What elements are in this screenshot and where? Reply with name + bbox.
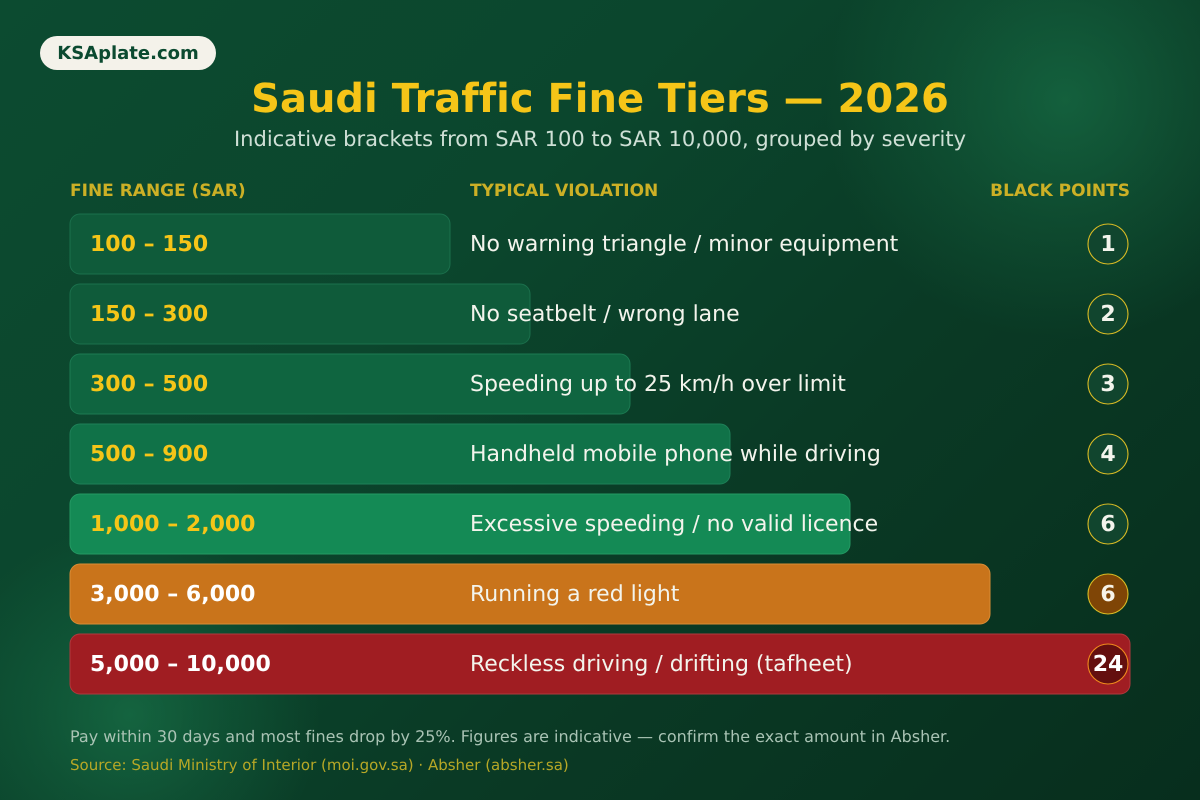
title: Saudi Traffic Fine Tiers — 2026 (251, 76, 949, 122)
points badge: 3 (1100, 372, 1116, 397)
row: 500 – 900 (70, 424, 1128, 484)
bar (70, 494, 850, 554)
fine range: 300 – 500 (90, 372, 208, 397)
bar (70, 424, 730, 484)
points badge (1088, 294, 1128, 334)
points badge: 6 (1100, 512, 1116, 537)
points badge: 24 (1093, 652, 1123, 677)
fine range: 150 – 300 (90, 302, 208, 327)
column heading: typical violation: TYPICAL VIOLATION (470, 181, 658, 201)
fine range: 1,000 – 2,000 (90, 512, 256, 537)
violation: Excessive speeding / no valid licence (470, 512, 878, 537)
source line: Source: Saudi Ministry of Interior (moi.gov.sa) · Absher (absher.sa) (70, 756, 569, 774)
brand badge: KSAplate.com (57, 43, 199, 64)
points badge (1088, 504, 1128, 544)
row: 5,000 – 10,000 (70, 634, 1130, 694)
bar (70, 634, 1130, 694)
brand badge (40, 36, 216, 70)
violation: Running a red light (470, 582, 680, 607)
bar (70, 564, 990, 624)
row: 300 – 500 (70, 354, 1128, 414)
bar (70, 214, 450, 274)
points badge (1088, 574, 1128, 614)
points badge (1088, 644, 1128, 684)
points badge (1088, 364, 1128, 404)
row: 100 – 150 (70, 214, 1128, 274)
points badge (1088, 434, 1128, 474)
violation: No seatbelt / wrong lane (470, 302, 740, 327)
points badge: 6 (1100, 582, 1116, 607)
subtitle: Indicative brackets from SAR 100 to SAR 10,000, grouped by severity (234, 127, 966, 151)
bar (70, 354, 630, 414)
row: 150 – 300 (70, 284, 1128, 344)
violation: Reckless driving / drifting (tafheet) (470, 652, 853, 677)
violation: Handheld mobile phone while driving (470, 442, 881, 467)
bar (70, 284, 530, 344)
points badge: 2 (1100, 302, 1116, 327)
column heading: fine range: FINE RANGE (SAR) (70, 181, 246, 201)
fine range: 5,000 – 10,000 (90, 652, 271, 677)
fine range: 500 – 900 (90, 442, 208, 467)
fine range: 3,000 – 6,000 (90, 582, 256, 607)
points badge: 4 (1100, 442, 1116, 467)
points badge: 1 (1100, 232, 1116, 257)
column heading: black points: BLACK POINTS (990, 181, 1130, 201)
fine range: 100 – 150 (90, 232, 208, 257)
violation: No warning triangle / minor equipment (470, 232, 899, 257)
footnote: Pay within 30 days and most fines drop by 25%. Figures are indicative — confirm the exact amount in Absher. (70, 727, 950, 746)
row: 3,000 – 6,000 (70, 564, 1128, 624)
violation: Speeding up to 25 km/h over limit (470, 372, 846, 397)
points badge (1088, 224, 1128, 264)
row: 1,000 – 2,000 (70, 494, 1128, 554)
